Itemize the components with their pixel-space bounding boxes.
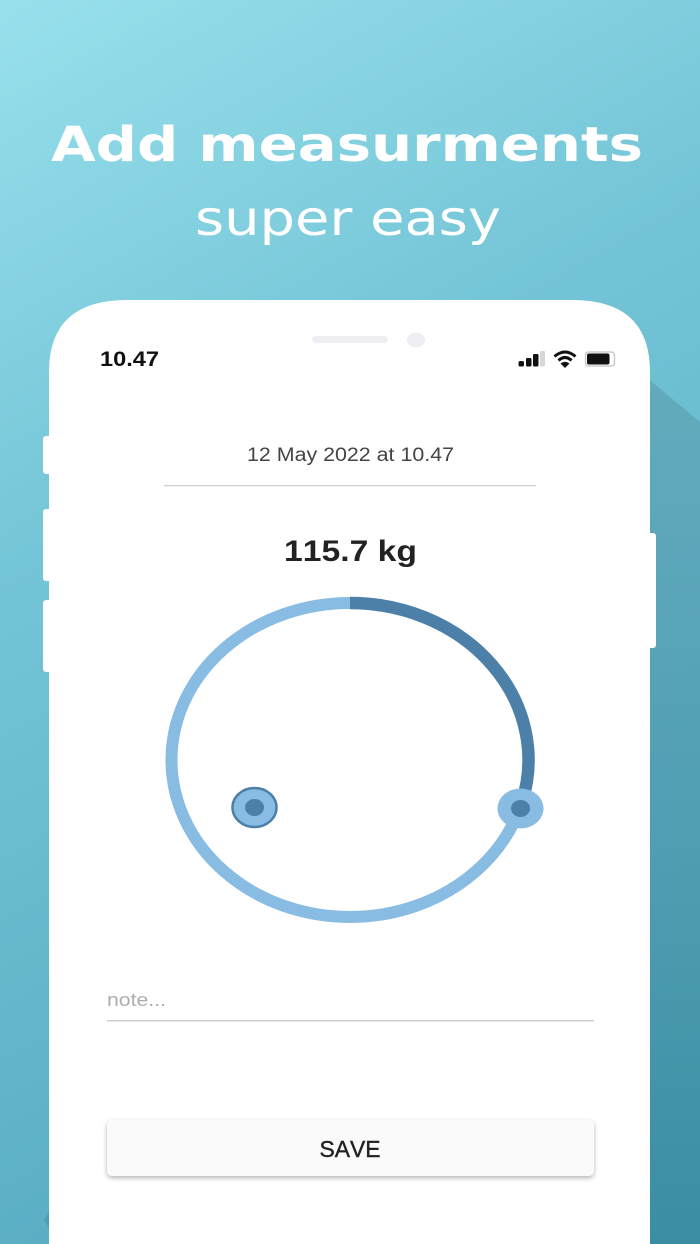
heading (51, 117, 643, 247)
small shadow notch left of phone (44, 1212, 49, 1228)
date text: 12 May 2022 at 10.47 (247, 445, 454, 466)
save button (107, 1120, 594, 1176)
battery icon (586, 352, 614, 366)
heading line 1: Add measurments (51, 117, 643, 173)
phone side buttons (43, 436, 656, 672)
heading line 2: super easy (195, 191, 501, 247)
wifi icon (554, 352, 576, 368)
status icons (518, 351, 614, 368)
dial progress arc (350, 603, 529, 802)
dial end handle (498, 788, 544, 828)
dial chart (172, 603, 544, 917)
button label: SAVE (320, 1136, 380, 1162)
diagonal shadow behind phone (640, 372, 700, 1244)
date underline (164, 485, 536, 486)
note underline (107, 1020, 594, 1022)
note placeholder: note... (107, 990, 166, 1010)
speaker (312, 336, 388, 343)
button surface (107, 1120, 594, 1176)
phone mockup (43, 300, 656, 1244)
weight value: 115.7 kg (284, 535, 417, 568)
dial track (172, 603, 528, 917)
signal icon (518, 351, 545, 366)
camera (407, 333, 425, 347)
dial inner handle (232, 788, 276, 827)
phone body (49, 300, 650, 1244)
status bar time: 10.47 (100, 348, 159, 371)
